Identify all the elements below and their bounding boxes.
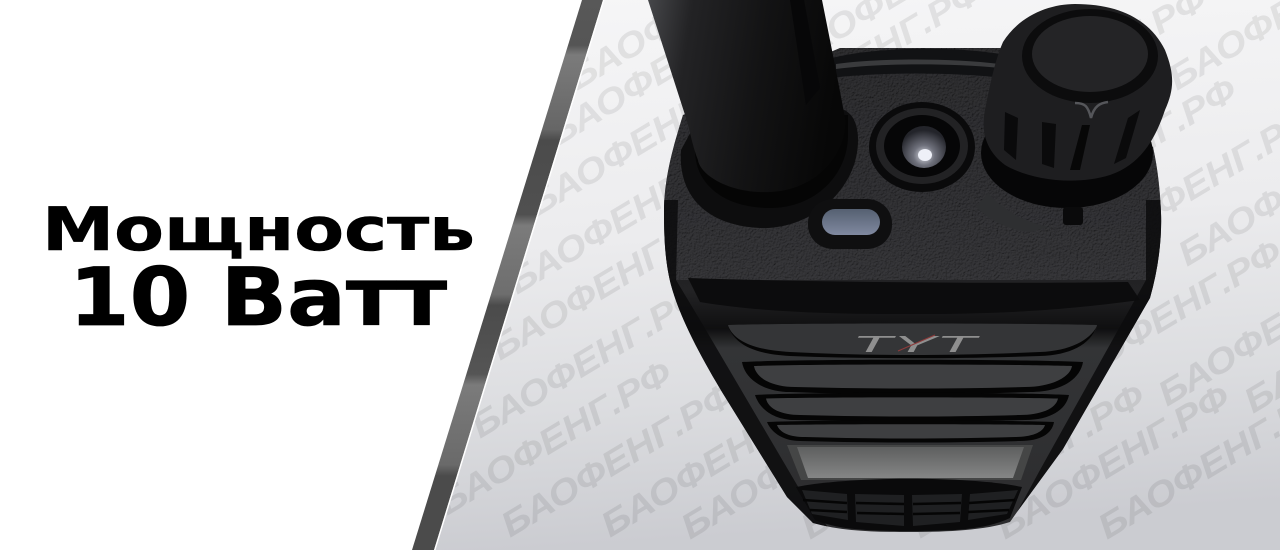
antenna: [648, 0, 845, 192]
knob marker wedge and stop: [976, 193, 1083, 232]
watermark pattern: БАОФЕНГ.РФ: [431, 0, 1280, 547]
side button: [808, 199, 892, 249]
watermark pattern: БАОФЕНГ.РФ: БАОФЕНГ.РФ: [541, 0, 789, 154]
LED indicator: [869, 102, 975, 192]
top rim: [825, 49, 1005, 78]
logo panel: TYT: TYT: [852, 331, 982, 357]
heading: Мощность 10 Ватт: Мощность: [42, 195, 475, 265]
diagonal striped band: [412, 0, 604, 550]
watermark pattern: БАОФЕНГ.РФ: БАОФЕНГ.РФ: [494, 375, 742, 545]
heading: Мощность 10 Ватт: [42, 195, 475, 344]
display screen: [787, 445, 1033, 480]
panel: grey photo backdrop: [434, 0, 1280, 550]
watermark pattern: БАОФЕНГ.РФ: БАОФЕНГ.РФ: [431, 353, 679, 523]
logo panel: TYT: [728, 324, 1097, 358]
radio body: [660, 40, 1170, 532]
keypad: [796, 479, 1022, 531]
watermark pattern: БАОФЕНГ.РФ: БАОФЕНГ.РФ: [794, 377, 1042, 547]
watermark pattern: БАОФЕНГ.РФ: БАОФЕНГ.РФ: [1041, 232, 1280, 402]
radio photo illustration: [648, 0, 1172, 532]
watermark pattern: БАОФЕНГ.РФ: БАОФЕНГ.РФ: [484, 198, 732, 368]
watermark pattern: БАОФЕНГ.РФ: БАОФЕНГ.РФ: [594, 375, 842, 545]
watermark pattern: БАОФЕНГ.РФ: БАОФЕНГ.РФ: [521, 54, 769, 224]
antenna collar: [681, 108, 858, 228]
watermark pattern: БАОФЕНГ.РФ: БАОФЕНГ.РФ: [501, 132, 749, 302]
heading: Мощность 10 Ватт: 10 Ватт: [69, 251, 448, 344]
watermark pattern: БАОФЕНГ.РФ: БАОФЕНГ.РФ: [464, 276, 712, 446]
volume knob: [981, 4, 1172, 208]
watermark pattern: БАОФЕНГ.РФ: БАОФЕНГ.РФ: [904, 376, 1152, 546]
watermark pattern: БАОФЕНГ.РФ: БАОФЕНГ.РФ: [674, 377, 922, 547]
speaker grille slots: [742, 360, 1083, 442]
watermark pattern: БАОФЕНГ.РФ: БАОФЕНГ.РФ: [989, 377, 1237, 547]
watermark pattern: БАОФЕНГ.РФ: БАОФЕНГ.РФ: [966, 0, 1214, 149]
watermark pattern: БАОФЕНГ.РФ: БАОФЕНГ.РФ: [996, 70, 1244, 240]
